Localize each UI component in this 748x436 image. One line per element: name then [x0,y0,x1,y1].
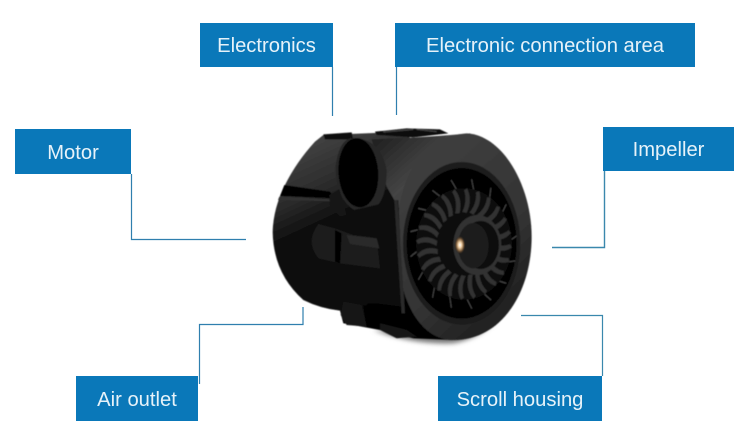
scroll shoulder [372,133,493,210]
outer impeller vanes [410,179,517,309]
label: Motor [15,129,131,174]
scroll housing [397,133,532,340]
leader line: electronics [332,67,334,116]
label: Impeller [603,127,734,171]
label: Electronic connection area [395,23,695,67]
shaft highlight [454,236,466,254]
connector stem [329,189,347,217]
lower clips [341,302,367,327]
leader line: air outlet [200,307,303,384]
label: Scroll housing: Scroll housing [457,389,583,411]
housing rim shading [403,162,520,325]
leader line: impeller [552,170,604,248]
top clips [323,128,448,139]
label: Electronics [200,23,333,67]
leader line: electronic connection area [396,67,398,115]
rib on rear body [280,185,335,198]
housing opening [407,168,517,319]
impeller wheel [416,188,512,300]
label: Air outlet [76,376,198,421]
label: Electronic connection area: Electronic connection area [426,35,664,57]
impeller hub [453,215,501,275]
motor rear body [273,132,453,340]
contact shadow [373,320,497,343]
label: Motor: Motor [47,142,99,164]
label: Electronics: Electronics [217,35,316,57]
side plug [312,224,380,268]
air outlet tube [335,138,387,211]
leader line: motor [132,174,246,240]
label: Air outlet: Air outlet [97,389,177,411]
label: Impeller: Impeller [633,139,704,161]
label: Scroll housing [438,376,602,421]
leader line: scroll housing [521,316,602,376]
